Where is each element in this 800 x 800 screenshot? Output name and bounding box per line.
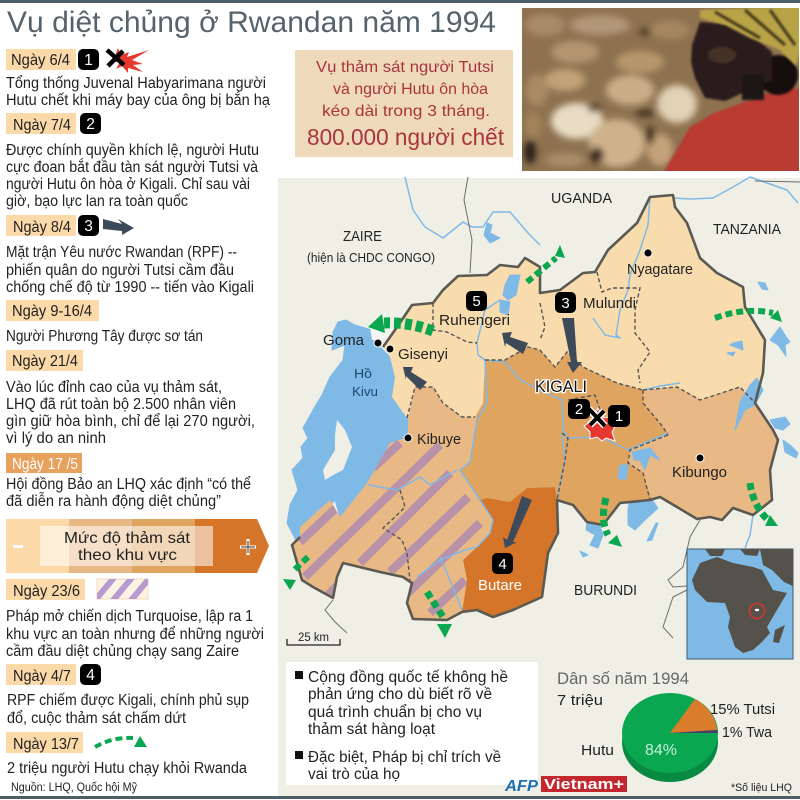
- event: 21/4: gìn giữ hòa bình, chỉ để lại 270 người,: [6, 413, 255, 430]
- legend: massacre severity arrow: Mức độ thảm sát: [64, 530, 191, 547]
- event: 4/7: 4: [86, 667, 95, 684]
- dark arrows: RPF advance: [403, 318, 582, 548]
- title: Vụ diệt chủng ở Rwandan năm 1994: [7, 6, 496, 39]
- place labels: Kivu: [352, 384, 378, 399]
- chart: population 1994 pie: Dân số năm 1994: [557, 669, 689, 688]
- event: 8/4: phiến quân do người Tutsi cầm đầu: [6, 262, 234, 279]
- place labels: BURUNDI: [574, 583, 637, 599]
- callout: death toll: kéo dài trong 3 tháng.: [322, 103, 490, 120]
- event: 23/6: cầm đầu diệt chủng chạy sang Zaire: [6, 643, 239, 660]
- hatch: French safe zone: [300, 443, 480, 613]
- event: 8/4: Ngày 8/4: [13, 219, 71, 236]
- event: 23/6: [6, 574, 264, 660]
- photo: woman and skulls: [522, 6, 800, 173]
- chart: population 1994 pie: [557, 669, 775, 782]
- green arrows: refugee flows: [283, 245, 782, 638]
- crash site: burst and plane: [584, 408, 616, 441]
- event: 6/4: Ngày 6/4: [11, 52, 70, 69]
- event: 23/6: Ngày 23/6: [13, 583, 80, 600]
- panel: international reaction: vai trò của họ: [308, 766, 400, 783]
- callout: death toll: và người Hutu ôn hòa: [333, 81, 488, 98]
- legend: massacre severity arrow: theo khu vực: [78, 547, 177, 564]
- region: Kibuye and south-west: [292, 387, 493, 620]
- numbered badges: 4: [498, 556, 507, 573]
- panel: international reaction: Cộng đồng quốc tế không hề: [308, 669, 508, 686]
- event: 21/4: [6, 350, 255, 447]
- panel: international reaction: Đặc biệt, Pháp bị chỉ trích về: [308, 749, 501, 766]
- scale bar: 25 km: [298, 632, 329, 644]
- scale bar: [287, 632, 340, 645]
- numbered badges: 3: [561, 295, 570, 312]
- event: 17/5: đã diễn ra hành động diệt chủng”: [6, 493, 221, 510]
- internal rivers and lakes: [368, 197, 763, 610]
- event: 7/4: cực đoan bắt đầu tàn sát người Tutsi và: [6, 159, 258, 176]
- panel: international reaction: thảm sát hàng loạt: [308, 721, 436, 738]
- numbered badges: [466, 291, 630, 574]
- event: 7/4: Được chính quyền khích lệ, người Hutu: [6, 142, 259, 159]
- numbered badges: 5: [472, 293, 481, 310]
- panel: international reaction: quá trình chuẩn bị cho vụ: [308, 704, 482, 721]
- Rwanda outer border: [292, 195, 778, 620]
- place labels: Kibungo: [672, 465, 727, 481]
- event: 4/7: đổ, cuộc thảm sát chấm dứt: [7, 710, 187, 727]
- event: 6/4: [6, 48, 270, 109]
- city markers: [374, 249, 704, 462]
- event: 21/4: LHQ đã rút toàn bộ 2.500 nhân viên: [6, 396, 236, 413]
- event: 4/7: [6, 664, 249, 727]
- place labels: Hồ: [354, 366, 372, 381]
- event: 13/7: 2 triệu người Hutu chạy khỏi Rwanda: [7, 760, 247, 777]
- callout: death toll: [295, 50, 513, 157]
- chart: population 1994 pie: 1% Twa: [722, 724, 773, 741]
- event: 7/4: giờ, bạo lực lan ra toàn quốc: [6, 193, 188, 210]
- event: 7/4: [6, 113, 259, 210]
- place labels: Ruhengeri: [439, 312, 510, 329]
- event: 9-16/4: Người Phương Tây được sơ tán: [6, 328, 203, 345]
- chart: population 1994 pie: 7 triệu: [557, 692, 603, 709]
- place labels: Nyagatare: [627, 262, 693, 278]
- place labels: Gisenyi: [398, 346, 448, 363]
- event: 7/4: người Hutu ôn hòa ở Kigali. Chỉ sau vài: [6, 176, 250, 193]
- event: 21/4: Vào lúc đỉnh cao của vụ thảm sát,: [6, 379, 222, 396]
- event: 21/4: Ngày 21/4: [12, 353, 78, 370]
- map: Rwanda: [278, 177, 800, 796]
- region: Butare: [462, 487, 558, 617]
- numbered badges: 2: [575, 401, 583, 418]
- shirt: [663, 86, 800, 173]
- legend: massacre severity arrow: [6, 519, 269, 573]
- place labels: Kibuye: [417, 432, 461, 448]
- event: 17/5: Hội đồng Bảo an LHQ xác định “có thể: [6, 476, 251, 493]
- place labels: [307, 191, 781, 599]
- neighbouring rivers and borders: [287, 177, 800, 638]
- chart: population 1994 pie: Hutu: [581, 742, 614, 759]
- region: Kibungo: [628, 387, 778, 520]
- event: 23/6: khu vực an toàn nhưng để những người: [6, 626, 264, 643]
- event: 13/7: [6, 732, 247, 777]
- event: 6/4: 1: [84, 52, 93, 69]
- chart: population 1994 pie: 15% Tutsi: [710, 701, 775, 718]
- event: 23/6: Pháp mở chiến dịch Turquoise, lập ra 1: [6, 608, 253, 625]
- scarf: [700, 6, 800, 66]
- source note: Nguồn: LHQ, Quốc hội Mỹ: [11, 782, 137, 794]
- event: 8/4: [6, 215, 254, 296]
- event: 7/4: Ngày 7/4: [13, 117, 71, 134]
- callout: death toll: Vụ thảm sát người Tutsi: [316, 59, 494, 76]
- panel: international reaction: [286, 662, 538, 785]
- event: 17/5: Ngày 17 /5: [12, 456, 78, 473]
- place labels: Butare: [478, 577, 522, 594]
- Rwanda base region: [383, 195, 765, 418]
- event: 7/4: 2: [86, 116, 95, 133]
- panel: international reaction: phản ứng cho dù biết rõ về: [308, 686, 492, 703]
- logo: AFP: AFP: [504, 778, 538, 795]
- callout: death toll: 800.000 người chết: [307, 124, 505, 150]
- event: 17/5: [6, 453, 251, 510]
- place labels: Goma: [323, 332, 365, 349]
- numbered badges: 1: [615, 408, 623, 425]
- logo: Vietnam+: Vietnam+: [544, 776, 624, 793]
- chart: population 1994 pie: 84%: [645, 742, 677, 759]
- prefecture boundaries: [383, 272, 755, 580]
- event: 6/4: Tổng thống Juvenal Habyarimana người: [6, 75, 266, 92]
- event: 13/7: Ngày 13/7: [13, 736, 79, 753]
- place labels: TANZANIA: [713, 222, 781, 238]
- event: 4/7: Ngày 4/7: [13, 668, 71, 685]
- region: central dark: [460, 347, 668, 525]
- event: 8/4: Mặt trận Yêu nước Rwandan (RPF) --: [6, 244, 237, 261]
- event: 9-16/4: Ngày 9-16/4: [12, 303, 92, 320]
- data note: *Số liệu LHQ: [731, 782, 792, 794]
- place labels: (hiện là CHDC CONGO): [307, 251, 435, 265]
- panel: timeline: [6, 48, 270, 777]
- event: 8/4: chống chế độ từ 1990 -- tiến vào Kigali: [6, 279, 254, 296]
- face: [691, 22, 798, 101]
- event: 8/4: 3: [84, 218, 93, 235]
- inset: Africa locator: [687, 549, 795, 659]
- place labels: Mulundi: [583, 296, 636, 312]
- event: 9-16/4: [6, 300, 203, 345]
- event: 4/7: RPF chiếm được Kigali, chính phủ sụp: [7, 692, 249, 709]
- event: 6/4: Hutu chết khi máy bay của ông bị bắn hạ: [6, 92, 270, 109]
- event: 21/4: vì lý do an ninh: [6, 430, 106, 447]
- place labels: ZAIRE: [343, 229, 382, 245]
- place labels: UGANDA: [551, 191, 612, 207]
- place labels: KIGALI: [535, 377, 587, 396]
